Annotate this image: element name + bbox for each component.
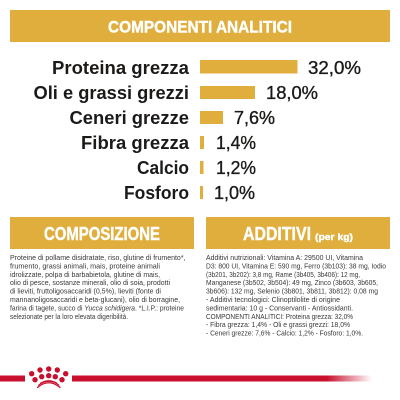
header: additivi: ADDITIVI	[243, 224, 311, 244]
text block: additivi: (3b201, 3b202): 3,8 mg, Rame (3b405, 3b406): 12 mg,	[206, 270, 360, 279]
text block: additivi: D3: 800 UI, Vitamina E: 590 mg, Ferro (3b103): 38 mg, Iodio	[206, 261, 386, 270]
text block: composizione: selezionate per la loro elevata digeribilità.	[10, 312, 128, 321]
text block: composizione: farina di tagete, succo di Yucca schidigera. *L.I.P.: proteine	[10, 303, 184, 312]
row: oli e grassi grezzi: Oli e grassi grezzi	[34, 83, 189, 103]
header: additivi: (per kg)	[315, 232, 353, 243]
text block: composizione	[10, 253, 186, 321]
text block: additivi: Manganese (3b502, 3b504): 49 mg, Zinco (3b603, 3b605,	[206, 278, 378, 287]
row: ceneri grezze	[70, 108, 275, 128]
text block: additivi: - Ceneri grezze: 7,6% - Calcio: 1,2% - Fosforo: 1,0%.	[206, 329, 363, 338]
row: proteina grezza: Proteina grezza	[52, 58, 190, 78]
header: componenti analitici	[10, 10, 390, 42]
header: componenti analitici: COMPONENTI ANALITICI	[108, 18, 292, 36]
text block: composizione: di lieviti, fruttoligosaccaridi (0,5%), lieviti (fonte di	[10, 287, 161, 296]
row: calcio	[137, 158, 256, 178]
header: composizione	[10, 217, 194, 249]
row: ceneri grezze: 7,6%	[234, 108, 275, 128]
row: calcio: Calcio	[137, 158, 189, 178]
row: fibra grezza	[81, 133, 256, 153]
text block: additivi: - Additivi tecnologici: Clinoptilolite di origine	[206, 295, 340, 304]
row: fosforo: 1,0%	[214, 183, 255, 203]
text block: additivi: COMPONENTI ANALITICI: Proteina grezza: 32,0%	[206, 312, 353, 321]
text block: additivi: - Fibra grezza: 1,4% - Oli e grassi grezzi: 18,0%	[206, 320, 350, 329]
row: oli e grassi grezzi	[34, 83, 318, 103]
row: fosforo: Fosforo	[124, 183, 189, 203]
text block: composizione: idrolizzate, polpa di barbabietola, glutine di mais,	[10, 270, 160, 279]
text block: composizione: mannanoligosaccaridi e beta-glucani), olio di borragine,	[10, 295, 180, 304]
bar chart: analytical components	[34, 58, 361, 203]
row: oli e grassi grezzi: 18,0%	[266, 83, 318, 103]
text block: additivi: Additivi nutrizionali: Vitamina A: 29500 UI, Vitamina	[206, 253, 364, 262]
header: composizione: COMPOSIZIONE	[44, 224, 160, 244]
row: proteina grezza: 32,0%	[308, 58, 361, 78]
icon: royal canin crown logo	[29, 366, 68, 388]
text block: composizione: olio di pesce, sostanze minerali, olio di soia, prodotti	[10, 278, 170, 287]
row: fibra grezza: Fibra grezza	[81, 133, 190, 153]
text block: composizione: frumento, grassi animali, mais, proteine animali	[10, 261, 160, 270]
header: additivi	[206, 217, 390, 249]
row: ceneri grezze: Ceneri grezze	[70, 108, 189, 128]
row: fibra grezza: 1,4%	[216, 133, 256, 153]
red line right fading	[72, 376, 372, 382]
row: fosforo	[124, 183, 255, 203]
text block: additivi: sedimentaria: 10 g - Conservanti - Antiossidanti.	[206, 303, 353, 312]
text block: additivi: 3b606): 132 mg, Selenio (3b801, 3b811, 3b812): 0,08 mg	[206, 287, 378, 296]
red line left	[0, 376, 25, 382]
row: proteina grezza	[52, 58, 361, 78]
row: calcio: 1,2%	[216, 158, 256, 178]
text block: composizione: Proteine di pollame disidratate, riso, glutine di frumento*,	[10, 253, 186, 262]
text block: additivi	[206, 253, 386, 338]
